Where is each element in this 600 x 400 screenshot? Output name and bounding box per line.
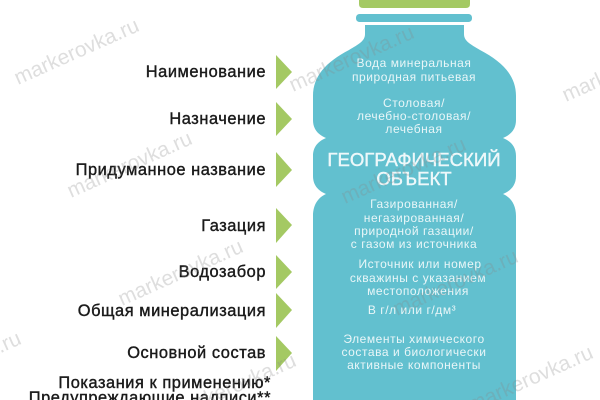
label: main composition: Основной состав bbox=[127, 344, 266, 362]
watermarks: markerovka.ru bbox=[286, 21, 418, 97]
text: source: Источник или номер bbox=[358, 257, 482, 271]
label: water source: Водозабор bbox=[179, 263, 266, 281]
text: carbonation options: Газированная/ bbox=[370, 197, 458, 211]
arrow 2 bbox=[276, 102, 292, 136]
label: indications: Показания к применению* bbox=[58, 374, 271, 392]
text: geographic object: ГЕОГРАФИЧЕСКИЙ bbox=[327, 149, 501, 170]
label: carbonation: Газация bbox=[201, 217, 266, 235]
watermarks: markerovka.ru bbox=[64, 127, 196, 203]
text: carbonation options: негазированная/ bbox=[364, 211, 464, 225]
text: composition: Элементы химического bbox=[343, 332, 485, 346]
text: carbonation options: природной газации/ bbox=[354, 224, 474, 238]
text: composition: активные компоненты bbox=[347, 358, 481, 372]
left labels bbox=[29, 63, 271, 400]
bottle neck ring bbox=[356, 14, 472, 22]
arrow 3 bbox=[276, 152, 292, 187]
arrow 6 bbox=[276, 293, 292, 328]
label: purpose: Назначение bbox=[169, 110, 266, 128]
watermarks: markerovka.ru bbox=[115, 235, 247, 311]
text: source: скважины с указанием bbox=[350, 271, 486, 285]
text: purpose options: Столовая/ bbox=[383, 96, 445, 110]
arrow 5 bbox=[276, 255, 292, 289]
text: source: местоположения bbox=[367, 284, 469, 298]
watermarks: markerovka.ru bbox=[338, 133, 470, 209]
text: composition: состава и биологически bbox=[342, 345, 486, 359]
bottle body bbox=[313, 25, 516, 400]
arrow 4 bbox=[276, 208, 292, 243]
bottle cap bbox=[359, 0, 470, 8]
text: units: В г/л или г/дм³ bbox=[368, 303, 456, 317]
text: purpose options: лечебная bbox=[385, 122, 443, 136]
text: purpose options: лечебно-столовая/ bbox=[357, 109, 471, 123]
watermarks: markerovka.ru bbox=[390, 245, 522, 321]
watermarks: markerovka.ru bbox=[11, 14, 143, 90]
bottle bbox=[313, 0, 516, 400]
green arrows bbox=[276, 55, 292, 371]
arrow 7 bbox=[276, 336, 292, 371]
text: water type: природная питьевая bbox=[352, 70, 476, 84]
text: geographic object: ОБЪЕКТ bbox=[376, 168, 452, 189]
text: carbonation options: с газом из источника bbox=[351, 237, 477, 251]
label: total mineralization: Общая минерализация bbox=[78, 302, 266, 320]
arrow 1 bbox=[276, 55, 292, 89]
label: brand name: Придуманное название bbox=[76, 161, 266, 179]
text: water type: Вода минеральная bbox=[357, 56, 471, 70]
label: name: Наименование bbox=[146, 63, 266, 81]
bottle label text bbox=[327, 56, 501, 372]
